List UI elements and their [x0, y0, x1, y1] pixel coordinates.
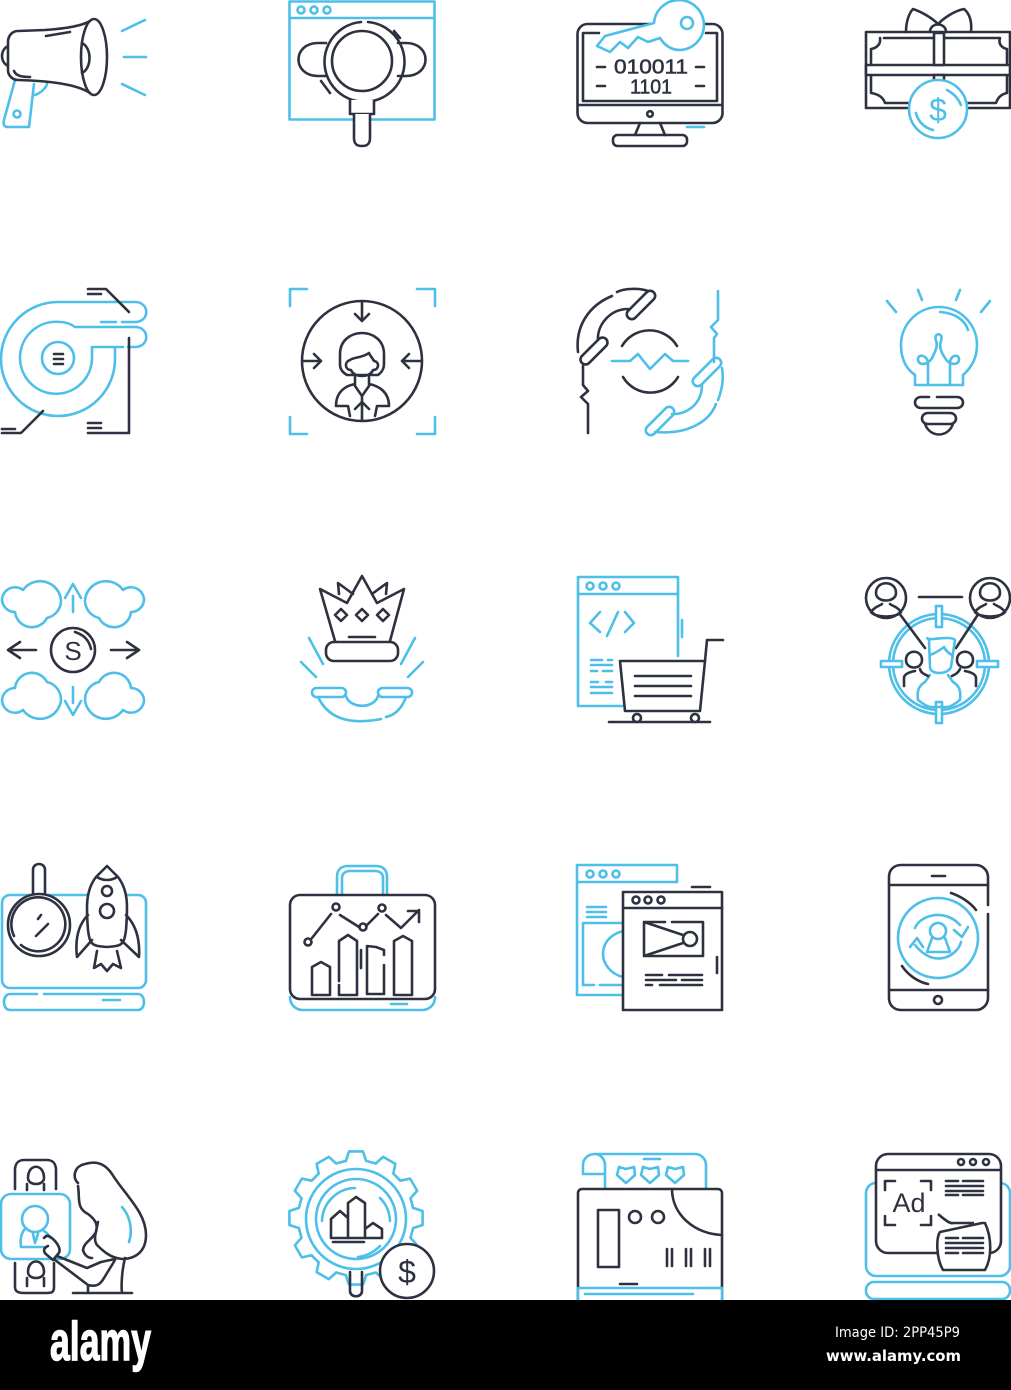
- coin S letter: S: [64, 636, 82, 666]
- footer bar: [0, 1300, 1011, 1390]
- website: www.alamy.com: [826, 1347, 961, 1365]
- alamy logo: alamy: [50, 1310, 151, 1372]
- binary text: 010011: [614, 56, 688, 78]
- icon: briefcase with growth chart: [290, 866, 435, 1010]
- image id: Image ID: 2PP45P9: [835, 1325, 960, 1341]
- icon: tablet with user refresh: [889, 865, 988, 1010]
- coin dollar sign: $: [398, 1254, 416, 1290]
- icon: woman choosing candidate: [1, 1160, 146, 1293]
- icon: phones with signal: [578, 289, 723, 437]
- icon: banknote gift with coin: [866, 9, 1010, 138]
- icon: scroll with stars and card: [578, 1154, 722, 1304]
- Ad label: Ad: [892, 1188, 926, 1218]
- binary text second line: 1101: [630, 76, 672, 98]
- icon: browser code and shopping cart: [578, 577, 723, 722]
- coin dollar sign: $: [929, 92, 947, 128]
- icon: gear with buildings and dollar coin: [288, 1150, 434, 1298]
- icon: turbo charger: [1, 289, 146, 433]
- icon: ad browser on laptop with speech bubble: [866, 1154, 1010, 1299]
- icon: magnifier on browser window: [290, 2, 434, 146]
- icon: light bulb: [887, 290, 990, 434]
- icon: coin with clouds and arrows: [2, 581, 144, 719]
- icon: audience target: [866, 578, 1010, 723]
- icon: crown and telephone: [301, 576, 423, 721]
- icon: magnifier and rocket on laptop: [2, 864, 146, 1010]
- icon: two browser windows: [577, 865, 722, 1010]
- icon: megaphone: [2, 19, 146, 127]
- icon: person in target circle: [290, 289, 435, 434]
- icon: monitor with key and binary code: [578, 0, 722, 146]
